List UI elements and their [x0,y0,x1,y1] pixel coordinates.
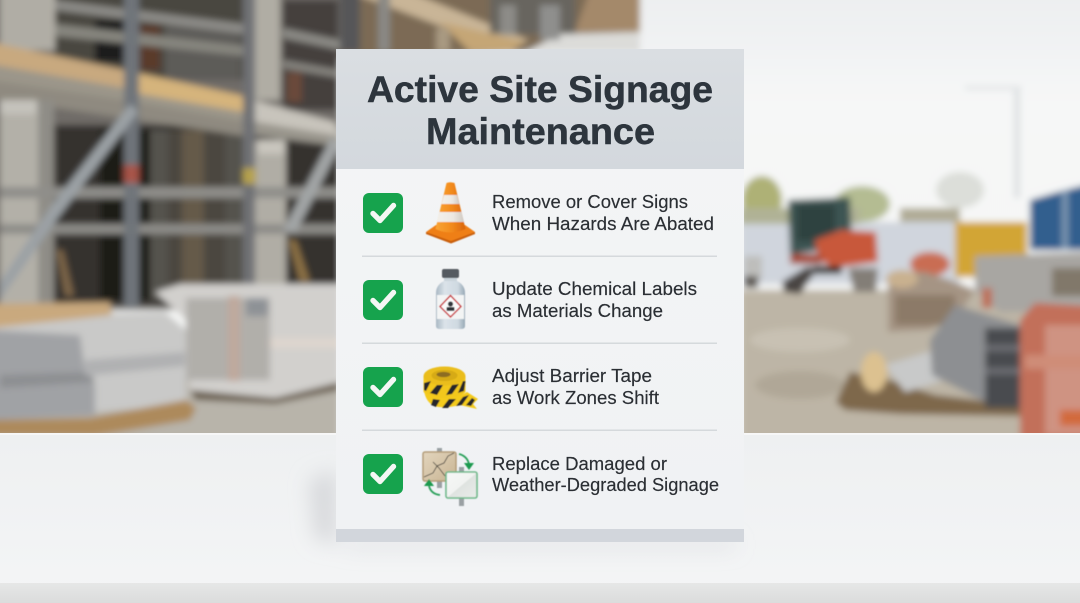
lower dark interior [50,125,340,305]
row 3: adjust barrier tape [363,365,659,409]
text: as Work Zones Shift [492,387,659,408]
building upper right of the card [320,0,640,60]
title: Active Site Signage [367,68,713,110]
text [492,365,659,408]
grey blocks [885,350,945,392]
title: Maintenance [426,110,655,152]
sign panel [336,49,744,542]
text [492,191,714,234]
background: blurred construction site photo [0,0,1080,450]
pallets [888,272,975,332]
blue container [1030,184,1080,250]
building base [0,0,340,310]
ground [0,378,336,433]
text: Update Chemical Labels [492,278,697,299]
text: Weather-Degraded Signage [492,474,719,495]
scaffold diagonals [0,104,138,300]
text: Adjust Barrier Tape [492,365,652,386]
text [492,278,697,321]
sign shadow on table [310,470,735,548]
brick stacks [1020,303,1080,445]
icon: checkbox [363,193,403,233]
text: Replace Damaged or [492,453,667,474]
hoarding fence [740,222,960,284]
row 2: update chemical labels [363,269,697,329]
footer band [336,529,744,542]
trees [742,176,782,224]
icon: checkbox [363,280,403,320]
material stack front with pallet [0,312,186,420]
material stack back [155,284,340,398]
excavator [788,197,852,255]
icon: sign replacement [423,448,477,506]
pale area under upper building [529,29,642,49]
row 1: remove or cover signs [363,182,714,244]
orange equipment [910,252,950,276]
icon: barrier tape roll [424,366,478,409]
icon: traffic cone [426,182,475,244]
scaffold upper bars [55,0,245,34]
text: Remove or Cover Signs [492,191,688,212]
header band [336,49,744,169]
text: When Hazards Are Abated [492,213,714,234]
field ground right [744,285,1030,433]
sign face [336,49,744,530]
icon: checkbox [363,367,403,407]
row 4: replace damaged signage [363,448,719,506]
concrete columns [0,103,42,308]
wood decking [0,40,186,92]
timber pallet [836,372,1020,416]
tape tail [424,391,478,409]
text: as Materials Change [492,300,663,321]
yellow container [955,222,1027,277]
wood props [56,250,74,296]
title [367,68,713,152]
scaffold horizontal bars [0,187,340,198]
icon: checkbox [363,454,403,494]
text [492,453,719,495]
crane in the distance [1014,88,1020,198]
icon: chemical bottle [436,269,465,329]
scaffold poles [124,0,139,308]
table surface [0,433,1080,603]
